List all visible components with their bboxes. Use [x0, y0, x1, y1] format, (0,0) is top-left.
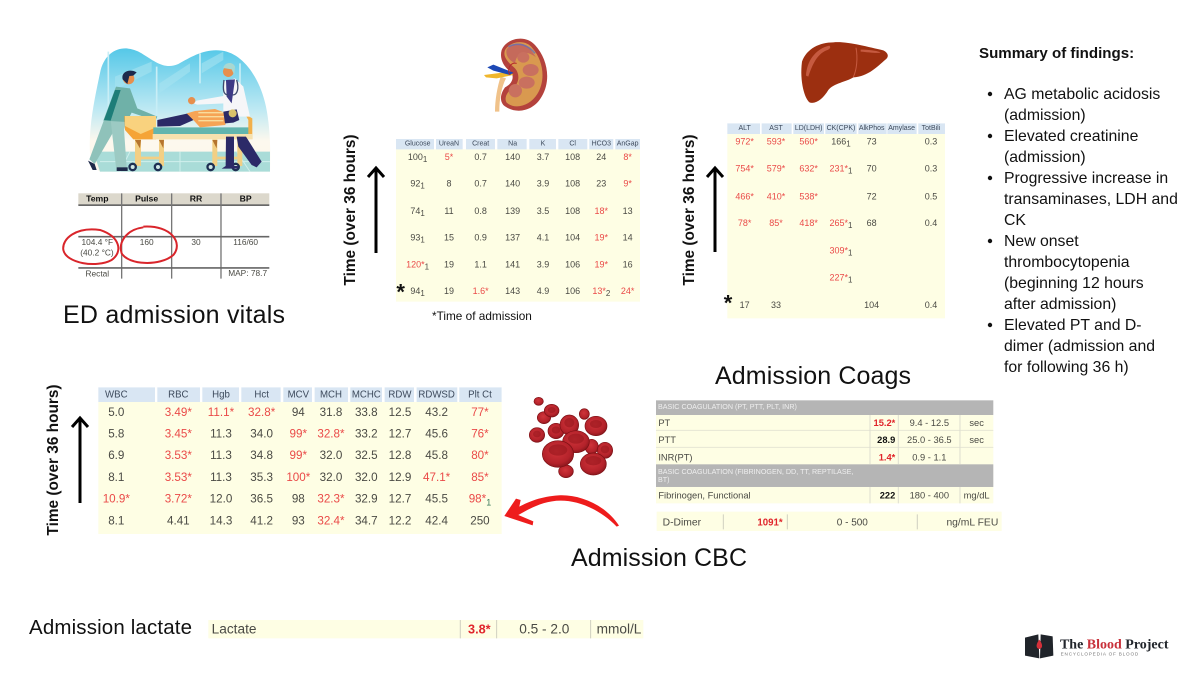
CBC header: MCHC: [352, 389, 381, 400]
CBC values: 12.9: [389, 471, 411, 484]
chemistry values: 1: [420, 235, 425, 244]
stretcher: [124, 114, 253, 171]
coag rows: 0.9 - 1.1: [912, 452, 946, 462]
liver header: [739, 125, 941, 132]
liver values: 1: [848, 276, 853, 285]
chemistry header: Creat: [472, 141, 489, 148]
summary bullets: New onset: [1004, 233, 1079, 250]
vitals values: 30: [191, 237, 201, 247]
heading: admission CBC: Admission CBC: [571, 544, 747, 572]
CBC values: 33.2: [355, 427, 378, 440]
liver values: 972*: [735, 137, 754, 147]
CBC values: 12.8: [389, 449, 411, 462]
liver values: 0.3: [925, 137, 937, 147]
CBC values: 4.41: [167, 514, 190, 527]
chemistry values: 3.9: [537, 260, 549, 270]
liver values: 754*: [735, 164, 754, 174]
chemistry values: 140: [505, 152, 520, 162]
panel: D-dimer: 1091*: [757, 517, 783, 528]
liver values: 104: [864, 300, 879, 310]
chemistry values: 108: [565, 206, 580, 216]
chemistry values: 1: [420, 289, 425, 298]
chemistry values: 137: [505, 232, 520, 242]
CBC values: 11.3: [210, 471, 232, 484]
summary bullets: after admission): [1004, 296, 1116, 313]
liver values: 166: [831, 137, 846, 147]
CBC values: 8.1: [108, 514, 124, 527]
CBC values: 12.2: [389, 514, 411, 527]
CBC values: 43.2: [425, 406, 448, 419]
liver values: 410*: [767, 191, 786, 201]
chemistry values: 4.9: [537, 286, 549, 296]
summary bullets: (beginning 12 hours: [1004, 275, 1144, 292]
chemistry values: 1: [423, 155, 428, 164]
vitals header row: Pulse: [135, 194, 158, 204]
panel: D-dimer: ng/mL FEU: [946, 517, 998, 528]
CBC values: 34.8: [250, 449, 273, 462]
chemistry values: 74: [410, 206, 420, 216]
chemistry values: 143: [505, 286, 520, 296]
CBC values: 99*: [290, 449, 308, 462]
liver values: [735, 137, 937, 310]
chemistry values: 106: [565, 286, 580, 296]
chemistry table: [396, 139, 640, 304]
CBC header: WBC: [105, 389, 128, 400]
liver values: 309*: [830, 246, 848, 256]
coag rows: [658, 418, 990, 501]
CBC header: MCH: [320, 389, 342, 400]
summary bullets: for following 36 h): [1004, 359, 1129, 376]
CBC values: 14.3: [210, 514, 232, 527]
panel: lactate result: [208, 620, 643, 638]
CBC values: 8.1: [108, 471, 124, 484]
chemistry values: 1: [420, 182, 425, 191]
coag rows: 1.4*: [879, 452, 896, 462]
arrow: red curved arrow to CBC table: [504, 495, 619, 527]
vitals values: 116/60: [233, 237, 258, 247]
chemistry values: 2: [606, 289, 611, 298]
panel: lactate result: Lactate: [212, 621, 256, 636]
liver values: 78*: [738, 218, 752, 228]
CBC values: 41.2: [250, 514, 273, 527]
liver values: 265*: [830, 218, 848, 228]
chemistry values: 5*: [445, 152, 454, 162]
chemistry values: 3.7: [537, 152, 549, 162]
CBC values: 32.0: [355, 471, 378, 484]
CBC values: 11.3: [210, 427, 232, 440]
CBC values: 93: [292, 514, 305, 527]
CBC values: 94: [292, 406, 305, 419]
liver values: 560*: [799, 137, 818, 147]
CBC values: 42.4: [425, 514, 448, 527]
liver values: 17: [740, 300, 750, 310]
CBC values: 45.6: [425, 427, 448, 440]
patient: [157, 109, 239, 127]
CBC values: 36.5: [250, 493, 273, 506]
chemistry values: 13*: [592, 286, 606, 296]
chemistry values: 8: [446, 179, 451, 189]
coag rows: 222: [880, 491, 895, 501]
liver values: 231*: [830, 164, 848, 174]
arrow: CBC time: [72, 418, 88, 503]
chemistry values: 3.5: [537, 206, 549, 216]
chemistry header: HCO3: [592, 141, 611, 148]
liver values: 70: [867, 164, 877, 174]
CBC values: 32.3*: [317, 493, 345, 506]
CBC values: 1: [486, 497, 491, 507]
liver values: 227*: [830, 273, 848, 283]
liver header: TotBili: [922, 125, 941, 132]
logo tagline: ENCYCLOPEDIA OF BLOOD: [1061, 652, 1139, 657]
liver header: CK(CPK): [827, 125, 855, 132]
axis label: CBC time: Time (over 36 hours): [45, 384, 62, 536]
liver values: 0.4: [925, 300, 937, 310]
vitals header row: RR: [190, 194, 203, 204]
summary bullets: Elevated creatinine: [1004, 128, 1139, 145]
icon: liver: [801, 42, 888, 103]
chemistry values: 1.1: [474, 260, 487, 270]
liver header: ALT: [739, 125, 752, 132]
chemistry values: 0.8: [474, 206, 487, 216]
liver values: 73: [867, 137, 877, 147]
summary heading: Summary of findings:: [979, 45, 1134, 62]
summary bullets: Elevated PT and D-: [1004, 317, 1142, 334]
CBC values: [103, 406, 491, 527]
coag rows: 180 - 400: [910, 491, 949, 501]
liver values: 68: [867, 218, 877, 228]
CBC values: 6.9: [108, 449, 124, 462]
chemistry values: 1.6*: [473, 286, 489, 296]
CBC values: 11.3: [210, 449, 232, 462]
CBC values: 99*: [290, 427, 308, 440]
arrow: chemistry time: [368, 168, 384, 253]
CBC values: 3.49*: [165, 406, 192, 419]
vitals values: [80, 237, 267, 279]
CBC values: 3.72*: [165, 493, 192, 506]
CBC header: Hgb: [212, 389, 230, 400]
CBC values: 3.53*: [165, 471, 192, 484]
admission marker asterisk, liver: *: [724, 291, 733, 316]
CBC values: 47.1*: [423, 471, 451, 484]
coag rows: Fibrinogen, Functional: [658, 491, 751, 501]
summary bullets: (admission): [1004, 149, 1086, 166]
icon: open book: [1025, 634, 1053, 658]
icon: kidney: [484, 39, 547, 112]
vitals values: Rectal: [86, 269, 109, 279]
coag rows: PT: [658, 418, 671, 428]
liver values: 85*: [769, 218, 783, 228]
chemistry values: 120*: [406, 260, 425, 270]
heading: admission coags: Admission Coags: [715, 362, 911, 390]
chemistry header: UreaN: [439, 141, 459, 148]
summary bullets: CK: [1004, 212, 1026, 229]
chemistry values: 141: [505, 260, 520, 270]
doctor: [188, 63, 262, 169]
liver values: 579*: [767, 164, 786, 174]
liver values: 1: [846, 140, 851, 149]
liver values: 1: [848, 167, 853, 176]
panel: D-dimer: [657, 512, 1002, 531]
panel: D-dimer: D-Dimer: [663, 517, 702, 528]
chemistry values: 139: [505, 206, 520, 216]
chemistry values: 11: [444, 206, 454, 216]
CBC values: 11.1*: [208, 406, 235, 419]
vitals values: 160: [140, 237, 154, 247]
liver header: AST: [769, 125, 784, 132]
liver enzyme table: [724, 123, 945, 318]
coag rows: 28.9: [877, 435, 895, 445]
logo wordmark: The Blood Project: [1060, 638, 1169, 653]
chemistry values: 19: [444, 286, 454, 296]
arrow: liver time: [707, 168, 723, 252]
CBC values: 32.0: [320, 449, 343, 462]
liver values: 593*: [767, 137, 786, 147]
CBC values: 85*: [471, 471, 489, 484]
illustration: patient on stretcher: [88, 48, 270, 172]
summary bullets: AG metabolic acidosis: [1004, 86, 1160, 103]
icon: red blood cells: [529, 397, 613, 478]
chemistry values: 15: [444, 232, 454, 242]
CBC values: 98*: [469, 493, 486, 506]
liver values: 33: [771, 300, 781, 310]
chemistry values: 0.7: [474, 179, 487, 189]
vitals values: 104.4 °F: [82, 237, 113, 247]
coag rows: PTT: [658, 435, 676, 445]
CBC values: 35.3: [250, 471, 273, 484]
coag section headers: BT): [658, 476, 670, 484]
liver header: LD(LDH): [795, 125, 822, 132]
hand-drawn red circles: [63, 227, 177, 264]
liver values: 1: [848, 249, 853, 258]
CBC values: 32.4*: [317, 514, 345, 527]
CBC header: Hct: [254, 389, 269, 400]
CBC values: 45.8: [425, 449, 448, 462]
chemistry values: 24: [596, 152, 606, 162]
chemistry values: 18*: [595, 206, 609, 216]
chemistry header: Glucose: [405, 141, 431, 148]
admission marker asterisk: *: [396, 279, 405, 304]
CBC values: 32.5: [355, 449, 378, 462]
summary bullets: transaminases, LDH and: [1004, 191, 1178, 208]
liver values: 0.4: [925, 218, 937, 228]
chemistry values: 0.9: [474, 232, 487, 242]
CBC values: 76*: [471, 427, 489, 440]
summary bullets: dimer (admission and: [1004, 338, 1155, 355]
chemistry values: 100: [408, 152, 423, 162]
chemistry values: 93: [410, 232, 420, 242]
CBC values: 45.5: [425, 493, 448, 506]
vitals header row: BP: [240, 194, 252, 204]
summary bullets: Progressive increase in: [1004, 170, 1168, 187]
liver values: 466*: [735, 191, 754, 201]
panel: D-dimer: 0 - 500: [837, 517, 868, 528]
CBC values: 80*: [471, 449, 489, 462]
chemistry values: 1: [425, 263, 430, 272]
coag rows: sec: [969, 435, 984, 445]
axis label: chemistry time: Time (over 36 hours): [342, 134, 359, 286]
CBC header: [105, 389, 492, 400]
liver values: 538*: [799, 191, 818, 201]
CBC values: 10.9*: [103, 493, 130, 506]
chemistry header: AnGap: [617, 141, 639, 148]
panel: lactate result: 3.8*: [468, 622, 491, 636]
summary bullets: thrombocytopenia: [1004, 254, 1130, 271]
liver values: 632*: [799, 164, 818, 174]
panel: lactate result: 0.5 - 2.0: [519, 621, 570, 636]
coag section headers: BASIC COAGULATION (PT, PTT, PLT, INR): [658, 403, 797, 411]
CBC values: 12.0: [210, 493, 233, 506]
CBC values: 32.8*: [248, 406, 276, 419]
chemistry values: 4.1: [537, 232, 549, 242]
CBC values: 77*: [471, 406, 489, 419]
CBC values: 12.5: [389, 406, 411, 419]
CBC values: 31.8: [320, 406, 342, 419]
chemistry values: 9*: [623, 179, 632, 189]
chemistry values: 94: [410, 286, 420, 296]
liver values: 72: [867, 191, 877, 201]
CBC table: [98, 387, 502, 534]
nurse: [88, 71, 157, 171]
chemistry header: Cl: [569, 141, 576, 148]
CBC values: 32.0: [320, 471, 343, 484]
CBC values: 12.7: [389, 427, 411, 440]
CBC values: 3.53*: [165, 449, 192, 462]
CBC values: 5.0: [108, 406, 125, 419]
CBC values: 34.0: [250, 427, 274, 440]
chemistry values: [406, 152, 635, 298]
coag rows: 15.2*: [874, 418, 896, 428]
chemistry values: 16: [623, 260, 633, 270]
chemistry values: 1: [420, 209, 425, 218]
panel: coagulation results: [656, 400, 993, 503]
chemistry values: 108: [565, 179, 580, 189]
liver values: 0.5: [925, 191, 937, 201]
coag rows: mg/dL: [964, 491, 990, 501]
panel: lactate result: mmol/L: [597, 621, 642, 636]
CBC values: 250: [470, 514, 490, 527]
chemistry values: 24*: [621, 286, 635, 296]
heading: ED admission vitals: ED admission vitals: [63, 301, 285, 329]
chemistry header: Na: [508, 141, 517, 148]
coag section headers: BASIC COAGULATION (FIBRINOGEN, DD, TT, REPTILASE,: [658, 468, 853, 476]
chemistry values: 13: [623, 206, 633, 216]
coag section headers: [658, 403, 853, 484]
chemistry values: 14: [623, 232, 633, 242]
axis label: liver time: Time (over 36 hours): [681, 134, 698, 286]
coag rows: INR(PT): [658, 452, 693, 462]
logo: The Blood Project: [1025, 634, 1169, 658]
CBC values: 5.8: [108, 427, 124, 440]
chemistry values: 104: [565, 232, 580, 242]
liver values: 0.3: [925, 164, 937, 174]
chemistry values: 23: [596, 179, 606, 189]
chemistry values: 19: [444, 260, 454, 270]
summary bullets: (admission): [1004, 107, 1086, 124]
summary bullets: [988, 86, 1178, 376]
CBC values: 98: [292, 493, 305, 506]
chemistry header: [405, 141, 639, 148]
chemistry values: 92: [410, 179, 420, 189]
chemistry values: 0.7: [474, 152, 487, 162]
CBC header: RBC: [168, 389, 189, 400]
vitals header row: Temp: [86, 194, 109, 204]
CBC header: RDWSD: [418, 389, 455, 400]
coag rows: sec: [969, 418, 984, 428]
panel: summary of findings: [979, 45, 1178, 376]
vitals values: MAP: 78.7: [228, 268, 267, 278]
vitals header row: [86, 194, 252, 204]
liver values: 418*: [799, 218, 818, 228]
CBC header: RDW: [388, 389, 412, 400]
CBC header: Plt Ct: [468, 389, 492, 400]
chemistry values: 108: [565, 152, 580, 162]
chemistry values: 19*: [595, 260, 609, 270]
CBC header: MCV: [288, 389, 310, 400]
vitals values: (40.2 °C): [80, 248, 114, 258]
CBC values: 3.45*: [165, 427, 192, 440]
CBC values: 33.8: [355, 406, 378, 419]
chemistry values: 8*: [623, 152, 632, 162]
CBC values: 32.9: [355, 493, 378, 506]
chemistry values: 3.9: [537, 179, 549, 189]
chemistry values: 106: [565, 260, 580, 270]
liver header: AlkPhos: [859, 125, 885, 132]
chemistry header: K: [541, 141, 546, 148]
coag rows: 9.4 - 12.5: [910, 418, 949, 428]
heading: admission lactate: Admission lactate: [29, 616, 192, 639]
CBC values: 32.8*: [317, 427, 345, 440]
CBC values: 34.7: [355, 514, 378, 527]
CBC values: 100*: [286, 471, 311, 484]
chemistry values: 140: [505, 179, 520, 189]
coag rows: 25.0 - 36.5: [907, 435, 952, 445]
liver values: 1: [848, 221, 853, 230]
chemistry values: 19*: [595, 232, 609, 242]
vitals table: [63, 193, 269, 279]
CBC values: 12.7: [389, 493, 411, 506]
liver header: Amylase: [888, 125, 915, 132]
footnote: time of admission: *Time of admission: [432, 309, 532, 323]
